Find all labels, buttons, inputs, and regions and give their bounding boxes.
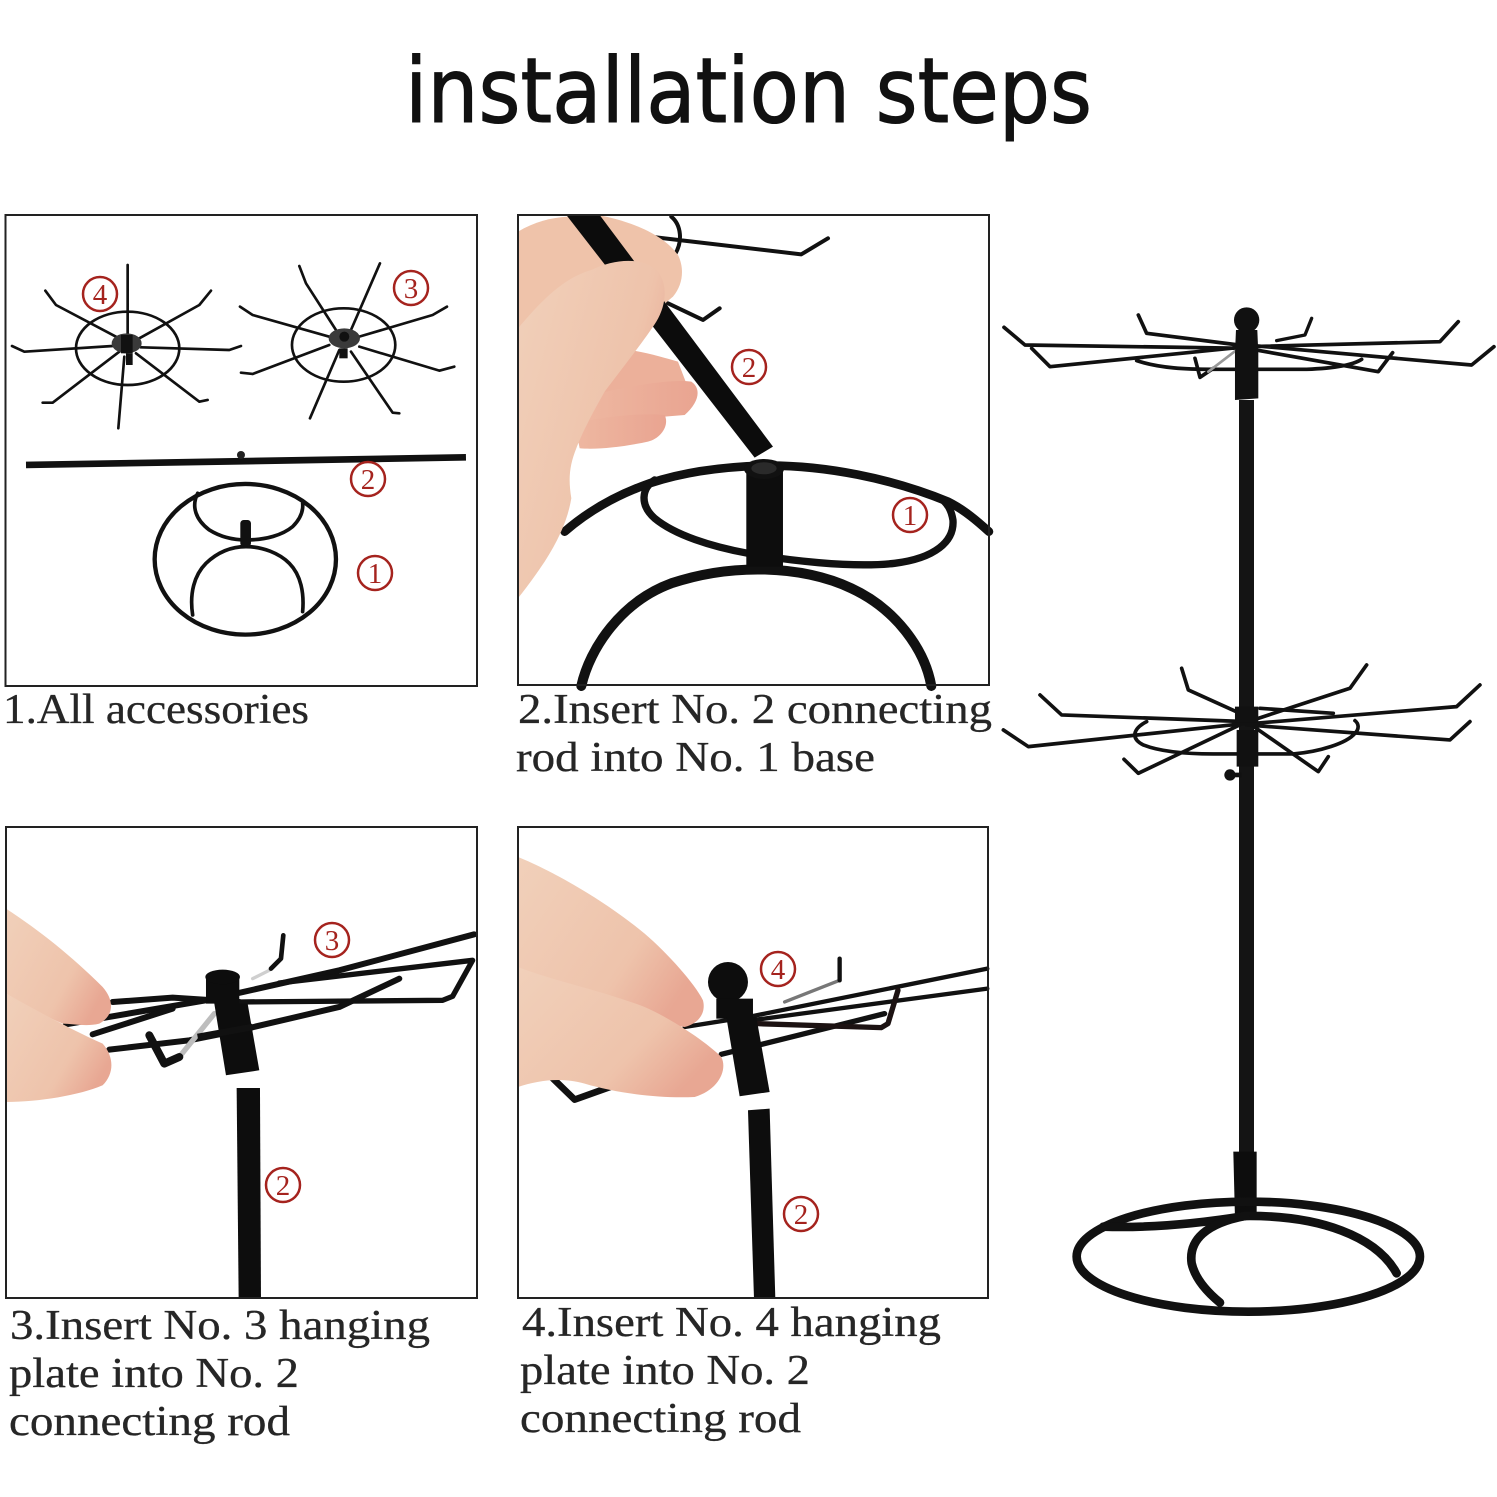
part 1: base xyxy=(155,484,336,635)
connecting rod xyxy=(566,215,773,458)
caption 3: 3.Insert No. 3 hanging xyxy=(10,1303,430,1349)
caption 4: plate into No. 2 xyxy=(520,1348,810,1394)
connecting rod xyxy=(237,1088,261,1298)
hanging plate wires xyxy=(550,959,987,1100)
back of hand and fingers xyxy=(518,215,698,449)
pole socket xyxy=(1233,1152,1257,1218)
connecting rod xyxy=(748,1109,775,1298)
number 2 xyxy=(784,1197,818,1231)
lower hub xyxy=(1224,707,1258,781)
lower tier xyxy=(1003,665,1480,773)
top finial xyxy=(1234,307,1259,400)
caption 2: 2.Insert No. 2 connecting xyxy=(518,687,992,733)
number 2: 2 xyxy=(794,1199,808,1231)
number 4 xyxy=(761,952,795,986)
part 3: hanging plate xyxy=(240,263,454,418)
caption 4: 4.Insert No. 4 hanging xyxy=(522,1300,941,1346)
number 4: 4 xyxy=(93,279,108,311)
central pole xyxy=(1239,400,1254,1160)
part 2: connecting rod xyxy=(26,451,466,465)
number 2: 2 xyxy=(361,464,375,496)
top tier xyxy=(1004,315,1494,377)
panel: insert plate 4 xyxy=(518,827,988,1298)
base tube xyxy=(744,459,784,567)
number 2: 2 xyxy=(276,1170,290,1202)
number 2: 2 xyxy=(742,352,756,384)
caption 3: plate into No. 2 xyxy=(9,1351,299,1397)
base xyxy=(1077,1202,1420,1312)
thumb xyxy=(518,261,665,598)
number 3 xyxy=(394,271,428,305)
number 2 xyxy=(266,1168,300,1202)
number 1: 1 xyxy=(368,558,382,590)
number 2 xyxy=(732,350,766,384)
hub and ball xyxy=(708,962,770,1096)
number 3: 3 xyxy=(404,273,418,305)
number 4 xyxy=(83,277,117,311)
hand xyxy=(6,909,111,1102)
base wireframe xyxy=(565,466,989,686)
number 4: 4 xyxy=(771,954,786,986)
number 1 xyxy=(893,498,927,532)
hanging plate hub xyxy=(198,970,259,1075)
assembled jewelry stand xyxy=(1003,307,1494,1312)
caption 4: connecting rod xyxy=(520,1396,801,1442)
number 3 xyxy=(315,923,349,957)
number 1 xyxy=(358,556,392,590)
panel: all accessories xyxy=(6,215,477,686)
title: installation steps xyxy=(405,39,1092,144)
number 1: 1 xyxy=(903,500,917,532)
number 3: 3 xyxy=(325,925,339,957)
caption 1: 1.All accessories xyxy=(3,687,309,733)
hanging plate wires xyxy=(66,934,474,1050)
part 4: hanging plate xyxy=(12,265,241,428)
caption 3: connecting rod xyxy=(9,1399,290,1445)
panel: insert rod into base xyxy=(518,215,989,686)
number 2 xyxy=(351,462,385,496)
caption 2: rod into No. 1 base xyxy=(516,735,875,781)
hooks at top xyxy=(650,217,828,320)
silver hooks xyxy=(149,935,283,1064)
panel: insert plate 3 xyxy=(6,827,477,1298)
hand xyxy=(518,857,723,1097)
